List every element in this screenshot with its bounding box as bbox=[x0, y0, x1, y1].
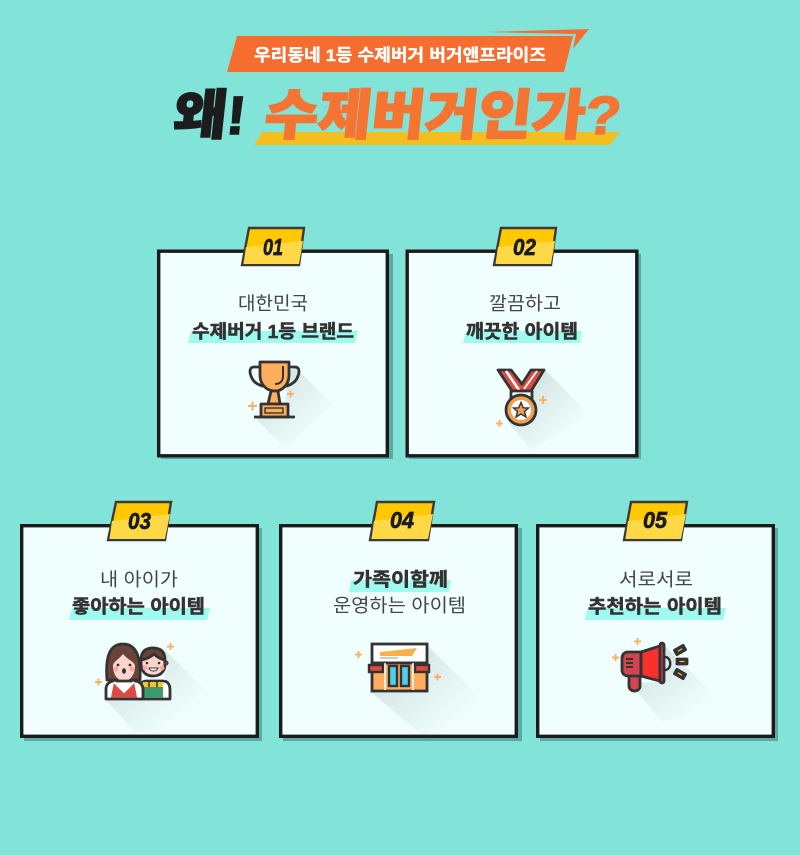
heading 03 bbox=[69, 569, 210, 620]
title: 수제버거인가? bbox=[262, 86, 624, 146]
heading 04: 운영하는 아이템 bbox=[333, 595, 466, 616]
badge 05 bbox=[624, 502, 687, 540]
panel: card 01 bbox=[159, 228, 393, 459]
badge 02: 02 bbox=[513, 234, 536, 260]
heading 03: 좋아하는 아이템 bbox=[72, 596, 205, 617]
heading 01: 대한민국 bbox=[238, 293, 308, 314]
heading 02 bbox=[463, 293, 582, 343]
panel: card 05 bbox=[538, 502, 778, 741]
icon: two people bbox=[95, 643, 205, 732]
banner ribbon bbox=[227, 29, 589, 72]
heading 04 bbox=[333, 569, 466, 616]
panel: card 02 bbox=[407, 228, 641, 459]
banner ribbon: 우리동네 1등 수제버거 버거앤프라이즈 bbox=[254, 46, 546, 65]
badge 01: 01 bbox=[263, 234, 283, 260]
icon: megaphone bbox=[612, 638, 722, 722]
badge 04 bbox=[370, 502, 434, 540]
heading 02: 깨끗한 아이템 bbox=[466, 321, 578, 342]
heading 01 bbox=[188, 293, 358, 343]
title: 왜! bbox=[171, 86, 249, 146]
badge 01 bbox=[242, 228, 304, 265]
man figure bbox=[139, 648, 170, 699]
badge 03 bbox=[108, 502, 171, 540]
icon: medal bbox=[496, 370, 590, 450]
header bbox=[171, 29, 624, 146]
heading 02: 깔끔하고 bbox=[489, 293, 561, 314]
panel: card 03 bbox=[22, 502, 262, 741]
heading 05 bbox=[585, 569, 726, 620]
heading 05: 추천하는 아이템 bbox=[588, 596, 722, 617]
badge 04: 04 bbox=[390, 507, 414, 533]
heading 05: 서로서로 bbox=[619, 569, 693, 590]
heading 03: 내 아이가 bbox=[100, 569, 178, 590]
heading 04: 가족이함께 bbox=[353, 569, 448, 590]
badge 05: 05 bbox=[643, 507, 668, 533]
panel: card 04 bbox=[281, 502, 522, 742]
icon: trophy bbox=[248, 362, 332, 448]
heading 01: 수제버거 1등 브랜드 bbox=[192, 321, 354, 342]
woman figure bbox=[106, 644, 143, 699]
badge 03: 03 bbox=[128, 508, 151, 534]
icon: burger shop bbox=[355, 644, 482, 742]
badge 02 bbox=[494, 228, 556, 265]
